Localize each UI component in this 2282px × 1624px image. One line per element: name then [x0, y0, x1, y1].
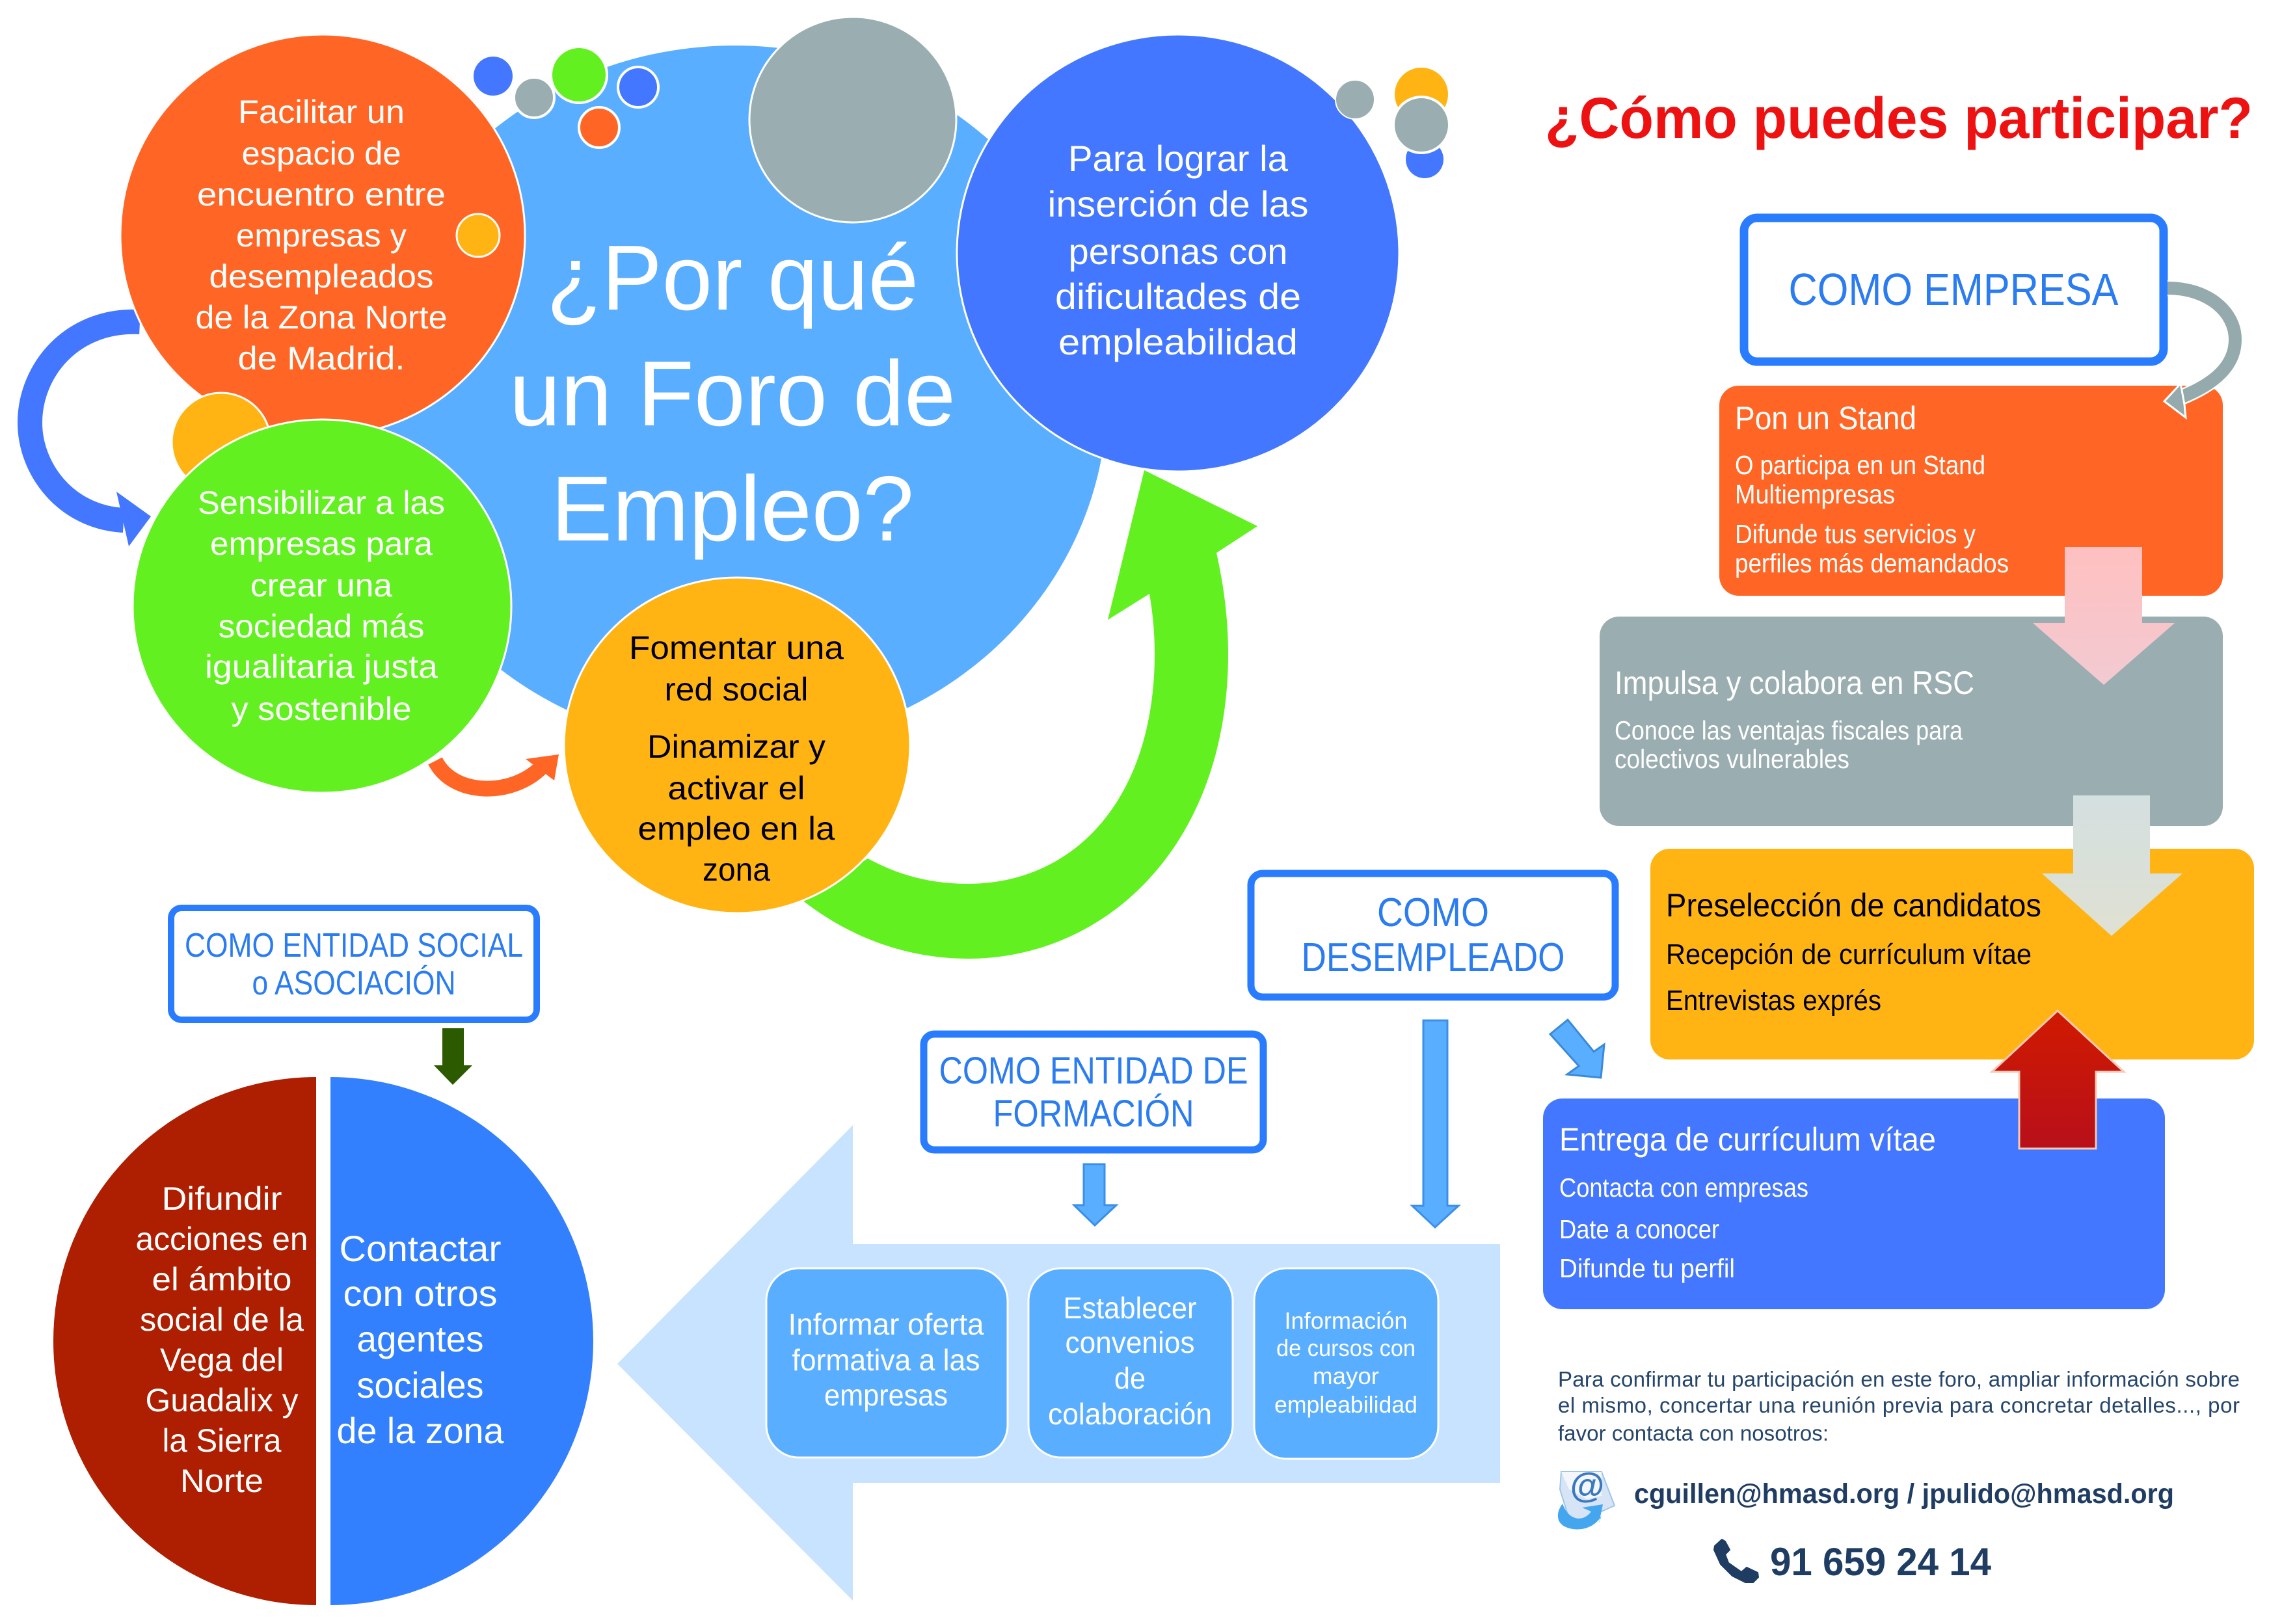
panel: preselección de candidatos: Entrevistas exprés	[1666, 985, 1881, 1017]
box: establecer convenios: convenios	[1066, 1325, 1194, 1359]
text: phone number: 91 659 24 14	[1770, 1540, 1992, 1584]
panel: entrega de currículum vítae: Date a conocer	[1559, 1214, 1719, 1244]
large green curved arrow	[801, 470, 1257, 959]
right half: contactar: con otros	[343, 1273, 497, 1314]
panel: pon un stand: Pon un Stand	[1735, 400, 1916, 436]
panel: preselección de candidatos	[1650, 849, 2254, 1059]
panel: pon un stand	[1719, 386, 2223, 596]
box: informar oferta: empresas	[824, 1378, 948, 1412]
panel: dark blue circle: dificultades de	[1055, 276, 1301, 317]
panel: green circle: empresas para	[210, 526, 433, 562]
text block: contact invitation: el mismo, concertar una reunión previa para concretar detalles..., por	[1558, 1393, 2240, 1417]
panel: como entidad de formación: FORMACIÓN	[993, 1093, 1194, 1135]
panel: pon un stand: Multiempresas	[1735, 479, 1895, 509]
box: información de cursos: mayor	[1313, 1363, 1379, 1389]
panel: green circle: Sensibilizar a las	[198, 485, 445, 521]
panel: orange circle: encuentro entre	[197, 176, 446, 213]
left half: difundir: el ámbito	[152, 1261, 291, 1298]
panel: orange circle: de Madrid.	[238, 340, 405, 377]
left half: difundir: Vega del	[160, 1342, 284, 1378]
panel: pon un stand: O participa en un Stand	[1735, 450, 1985, 480]
panel: como entidad social	[171, 908, 537, 1020]
right half: contactar	[330, 1077, 593, 1605]
panel: como desempleado: COMO	[1377, 890, 1489, 935]
box: establecer convenios	[1028, 1268, 1233, 1458]
icon: envelope: @	[1570, 1466, 1604, 1505]
left half: difundir	[53, 1077, 316, 1605]
curved arrow: blue, orange circle to green circle	[30, 322, 151, 546]
panel: como entidad de formación: COMO ENTIDAD DE	[939, 1050, 1248, 1092]
box: establecer convenios: Establecer	[1063, 1291, 1197, 1325]
panel: impulsa RSC	[1600, 617, 2223, 826]
panel: como desempleado	[1251, 873, 1615, 997]
left half: difundir: Difundir	[161, 1180, 282, 1217]
title: ¿Por qué un Foro de Empleo?: ¿Por qué	[546, 226, 919, 330]
panel: dark blue circle: inserción de las	[1047, 183, 1309, 224]
box: información de cursos: de cursos con	[1276, 1335, 1416, 1361]
box: establecer convenios: colaboración	[1048, 1397, 1212, 1431]
box: informar oferta: Informar oferta	[788, 1307, 984, 1341]
text block: contact invitation: Para confirmar tu participación en este foro, ampliar información sobre	[1558, 1367, 2240, 1391]
panel: green circle: y sostenible	[232, 691, 411, 727]
box: información de cursos: empleabilidad	[1274, 1391, 1417, 1418]
arrow: dark green down	[434, 1028, 472, 1085]
title: ¿Por qué un Foro de Empleo?: Empleo?	[551, 457, 914, 561]
panel: dark blue circle: empleabilidad	[1058, 321, 1298, 362]
text block: contact invitation: favor contacta con nosotros:	[1558, 1421, 1829, 1445]
big light blue circle	[363, 46, 1107, 748]
panel: dark blue circle: Para lograr la	[1068, 138, 1289, 179]
panel: dark blue circle: personas con	[1068, 231, 1288, 272]
panel: pon un stand: perfiles más demandados	[1735, 548, 2009, 578]
arrow: pink down	[2033, 547, 2175, 685]
panel: entrega de currículum vítae: Contacta con empresas	[1559, 1173, 1808, 1203]
right half: contactar: Contactar	[340, 1228, 501, 1269]
box: información de cursos	[1254, 1268, 1438, 1459]
big grey circle	[749, 17, 956, 222]
arrow: red up	[1992, 1011, 2124, 1149]
curved arrow: grey, empresa to stand	[2164, 288, 2235, 418]
panel: orange circle	[120, 34, 525, 436]
title: ¿Por qué un Foro de Empleo?	[509, 226, 956, 561]
panel: orange circle: empresas y	[236, 217, 407, 254]
arrow: blue diagonal	[1550, 1020, 1604, 1078]
panel: yellow circle	[564, 578, 910, 913]
panel: entrega de currículum vítae: Difunde tu perfil	[1559, 1253, 1735, 1283]
curved arrow: orange, green circle to yellow circle	[435, 754, 559, 789]
heading: ¿Cómo puedes participar?: ¿Cómo puedes participar?	[1545, 85, 2253, 150]
left half: difundir: la Sierra	[163, 1422, 282, 1459]
text block: contact invitation	[1558, 1367, 2240, 1445]
left half: difundir: acciones en	[135, 1221, 308, 1257]
panel: orange circle: Facilitar un	[238, 94, 405, 130]
panel: green circle: igualitaria justa	[205, 648, 438, 685]
chart: split circle	[53, 1077, 593, 1605]
panel: dark blue circle	[957, 34, 1399, 472]
box: establecer convenios: de	[1114, 1361, 1146, 1395]
panel: preselección de candidatos: Preselección de candidatos	[1666, 887, 2041, 924]
left half: difundir: social de la	[140, 1301, 304, 1338]
decorative small circles, top centre	[474, 47, 658, 148]
left half: difundir: Guadalix y	[146, 1382, 298, 1418]
panel: green circle: sociedad más	[219, 608, 424, 645]
panel: como empresa	[1744, 218, 2164, 362]
decorative yellow circle	[172, 393, 271, 492]
panel: preselección de candidatos: Recepción de currículum vítae	[1666, 938, 2032, 970]
panel: green circle: crear una	[250, 567, 392, 604]
icon: envelope	[1558, 1466, 1615, 1530]
title: ¿Por qué un Foro de Empleo?: un Foro de	[509, 342, 956, 446]
panel: light blue arrow with actions	[617, 1125, 1500, 1601]
panel: como desempleado: DESEMPLEADO	[1301, 935, 1565, 980]
panel: impulsa RSC: colectivos vulnerables	[1615, 744, 1849, 774]
panel: pon un stand: Difunde tus servicios y	[1735, 519, 1976, 549]
right half: contactar: sociales	[356, 1364, 484, 1405]
panel: como entidad social: o ASOCIACIÓN	[252, 965, 455, 1002]
panel: yellow circle: red social	[665, 671, 808, 708]
right half: contactar: agentes	[356, 1318, 484, 1359]
panel: como empresa: COMO EMPRESA	[1789, 264, 2119, 315]
text: email addresses: cguillen@hmasd.org / jpulido@hmasd.org	[1634, 1478, 2174, 1510]
right half: contactar: de la zona	[337, 1410, 504, 1451]
box: informar oferta: formativa a las	[792, 1343, 980, 1377]
panel: yellow circle: Dinamizar y	[647, 728, 826, 765]
box: informar oferta	[766, 1268, 1008, 1458]
panel: yellow circle: activar el	[667, 770, 805, 806]
decorative small circles, top right	[1336, 68, 1449, 178]
panel: como entidad de formación	[924, 1034, 1263, 1150]
panel: impulsa RSC: Impulsa y colabora en RSC	[1615, 665, 1974, 701]
panel: impulsa RSC: Conoce las ventajas fiscales para	[1615, 715, 1963, 745]
icon: phone	[1714, 1539, 1758, 1582]
panel: orange circle: de la Zona Norte	[195, 299, 448, 336]
panel: yellow circle: empleo en la	[638, 810, 835, 847]
panel: orange circle: espacio de	[242, 135, 401, 172]
panel: orange circle: desempleados	[209, 258, 433, 295]
panel: yellow circle: zona	[703, 851, 770, 888]
panel: entrega de currículum vítae	[1543, 1098, 2165, 1309]
panel: como entidad social: COMO ENTIDAD SOCIAL	[185, 927, 523, 965]
arrow: long blue down	[1412, 1020, 1458, 1227]
panel: entrega de currículum vítae: Entrega de currículum vítae	[1559, 1121, 1936, 1158]
left half: difundir: Norte	[180, 1463, 263, 1499]
box: información de cursos: Información	[1284, 1307, 1408, 1334]
panel: yellow circle: Fomentar una	[629, 630, 844, 666]
arrow: short blue down	[1074, 1164, 1116, 1225]
panel: green circle	[133, 419, 511, 793]
arrow: pale down	[2042, 795, 2182, 936]
